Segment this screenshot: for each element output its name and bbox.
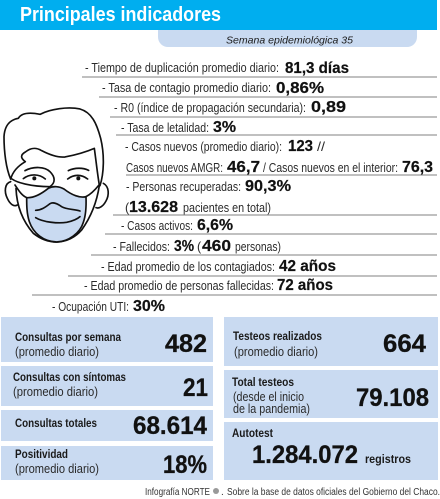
- panel: positividad: (promedio diario): [15, 462, 99, 476]
- icon: face with mask: [4, 108, 108, 242]
- panel: consultas por semana: (promedio diario): [15, 345, 99, 359]
- icon: globe: [213, 488, 219, 494]
- row: edad promedio fallecidas: - Edad promedio de personas fallecidas:: [84, 279, 274, 293]
- row: tasa de letalidad: 3%: [213, 119, 236, 136]
- week tab: Semana epidemiológica 35: [226, 34, 353, 46]
- row: fallecidos: [91, 238, 437, 255]
- row: edad promedio contagiados: 42 años: [279, 258, 336, 275]
- panel: total testeos: Total testeos: [232, 375, 294, 389]
- panel: testeos realizados: [224, 317, 438, 366]
- row: R0: 0,89: [311, 99, 346, 116]
- row: ocupación UTI: [52, 298, 165, 315]
- row: ocupación UTI: 30%: [133, 298, 165, 315]
- row: personas recuperadas: 90,3%: [245, 178, 291, 195]
- row: edad promedio contagiados: [68, 258, 437, 276]
- row: edad promedio fallecidas: 72 años: [277, 277, 333, 294]
- panel: total testeos: [224, 370, 438, 418]
- panel: total testeos: 79.108: [356, 384, 429, 412]
- row: casos nuevos: / Casos nuevos en el interior:: [263, 161, 398, 175]
- row: tasa de contagio: - Tasa de contagio promedio diario:: [102, 81, 271, 95]
- row: casos nuevos: [125, 138, 437, 176]
- panel: consultas con síntomas: Consultas con síntomas: [13, 370, 126, 384]
- row: edad promedio fallecidas: [32, 277, 437, 295]
- row: fallecidos: personas): [235, 240, 281, 254]
- panel: testeos realizados: Testeos realizados: [233, 329, 322, 343]
- row: ocupación UTI: - Ocupación UTI:: [52, 300, 129, 314]
- panel: consultas por semana: 482: [165, 330, 207, 358]
- panel: positividad: Positividad: [15, 447, 68, 461]
- week tab: [158, 30, 417, 47]
- row: casos nuevos: Casos nuevos AMGR:: [126, 161, 223, 175]
- row: casos nuevos: 46,7: [227, 159, 260, 176]
- row: tasa de letalidad: - Tasa de letalidad:: [121, 121, 209, 135]
- row: fallecidos: (: [197, 240, 202, 254]
- row: edad promedio contagiados: - Edad promedio de los contagiados:: [101, 260, 275, 274]
- panel: consultas totales: [1, 410, 213, 441]
- panel: consultas por semana: [1, 317, 213, 362]
- panel: total testeos: (desde el inicio: [233, 390, 304, 404]
- row: tiempo de duplicación: 81,3 días: [285, 60, 349, 77]
- row: tasa de contagio: 0,86%: [276, 80, 324, 97]
- panel: consultas totales: 68.614: [133, 412, 207, 440]
- panel: consultas con síntomas: (promedio diario): [13, 385, 98, 399]
- panel: consultas con síntomas: [1, 366, 213, 406]
- panel: consultas por semana: Consultas por semana: [15, 330, 121, 344]
- row: casos activos: - Casos activos:: [121, 219, 193, 233]
- row: casos activos: 6,6%: [197, 217, 233, 234]
- row: personas recuperadas: pacientes en total): [183, 201, 271, 215]
- panel: positividad: [1, 446, 213, 480]
- row: personas recuperadas: (: [125, 201, 130, 215]
- header band: [0, 0, 437, 30]
- row: fallecidos: 3%: [174, 238, 194, 255]
- panel: testeos realizados: 664: [383, 330, 426, 358]
- row: fallecidos: 460: [202, 238, 231, 255]
- row: tiempo de duplicación: - Tiempo de duplicación promedio diario:: [85, 61, 279, 75]
- panel: testeos realizados: (promedio diario): [234, 345, 318, 359]
- row: casos nuevos: 123: [288, 138, 313, 155]
- panel: autotest: [224, 422, 438, 480]
- footer credit: Infografía NORTE: [145, 487, 210, 498]
- row: personas recuperadas: [113, 178, 437, 216]
- row: tasa de contagio: [99, 80, 437, 97]
- panel: total testeos: de la pandemia): [233, 402, 310, 416]
- row: personas recuperadas: - Personas recuperadas:: [126, 180, 241, 194]
- row: casos nuevos: - Casos nuevos (promedio diario):: [125, 140, 282, 154]
- panel: positividad: 18%: [163, 451, 207, 479]
- row: tasa de letalidad: [116, 119, 437, 136]
- icon: mask: [27, 187, 86, 242]
- row: personas recuperadas: 13.628: [129, 199, 178, 216]
- panel: autotest: registros: [365, 452, 411, 466]
- row: fallecidos: - Fallecidos:: [113, 240, 170, 254]
- row: casos nuevos: //: [317, 140, 326, 154]
- panel: consultas con síntomas: 21: [183, 374, 208, 402]
- row: R0: [110, 99, 437, 117]
- row: R0: - R0 (índice de propagación secundaria):: [114, 101, 306, 115]
- panel: autotest: 1.284.072: [252, 441, 358, 469]
- row: tiempo de duplicación: [82, 60, 437, 77]
- row: casos activos: [105, 217, 437, 234]
- panel: consultas totales: Consultas totales: [15, 416, 97, 430]
- row: casos nuevos: 76,3: [402, 159, 433, 176]
- panel: autotest: Autotest: [232, 426, 273, 440]
- title: Principales indicadores: [20, 3, 221, 26]
- footer credit: .: [221, 487, 224, 498]
